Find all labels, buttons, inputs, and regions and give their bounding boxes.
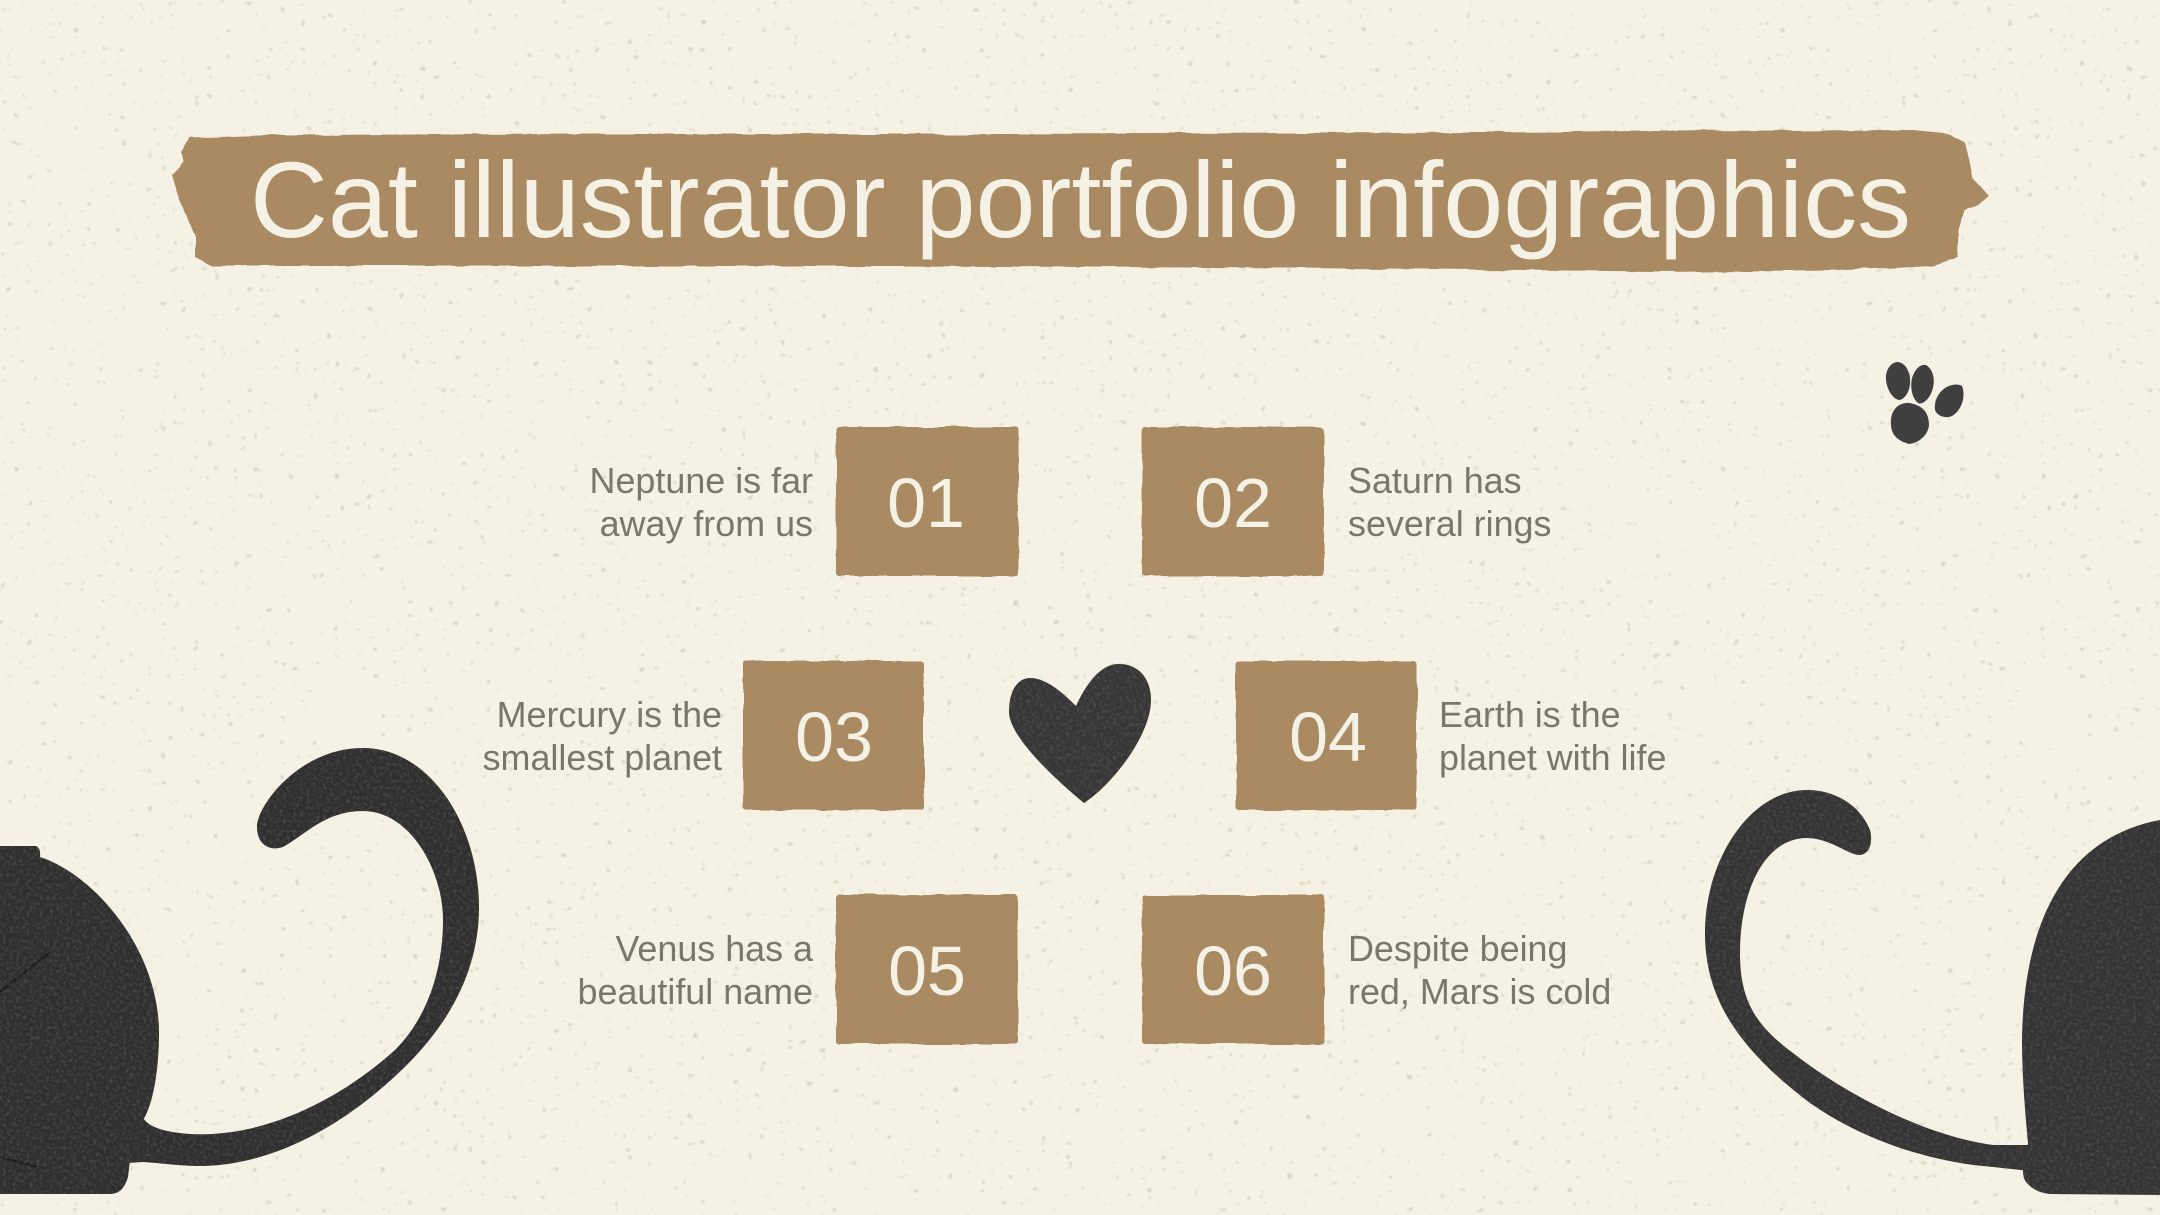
icon: paw print	[1886, 362, 1964, 444]
text 04: Earth is the	[1439, 695, 1621, 735]
text 01: Neptune is far	[590, 461, 813, 501]
text 05: beautiful name	[578, 972, 813, 1012]
number box 05	[836, 895, 1018, 1044]
number 06: 06	[1194, 932, 1272, 1010]
number 04: 04	[1289, 698, 1367, 776]
item 01	[590, 427, 1018, 576]
icon: heart	[1009, 664, 1151, 803]
right cat tail	[1705, 790, 2030, 1171]
right cat body	[2022, 820, 2160, 1195]
number 01: 01	[887, 464, 965, 542]
item 02	[1142, 427, 1551, 576]
left cat markings	[0, 953, 49, 992]
number 03: 03	[795, 698, 873, 776]
number box 06	[1142, 895, 1324, 1044]
number 02: 02	[1194, 464, 1272, 542]
item 06	[1142, 895, 1611, 1044]
left cat tail	[128, 748, 479, 1166]
text 03: smallest planet	[483, 738, 722, 778]
text 03: Mercury is the	[497, 695, 722, 735]
text 02: Saturn has	[1348, 461, 1522, 501]
text 02: several rings	[1348, 504, 1551, 544]
number box 01	[836, 427, 1018, 576]
left cat body	[0, 846, 159, 1194]
number 05: 05	[888, 932, 966, 1010]
title text: Cat illustrator portfolio infographics	[250, 139, 1911, 260]
number box 02	[1142, 427, 1324, 576]
item 03	[483, 661, 924, 810]
text 06: Despite being	[1348, 929, 1567, 969]
banner torn brush shape	[172, 130, 1989, 272]
cat right: body and tail	[1705, 790, 2160, 1195]
text 01: away from us	[600, 504, 813, 544]
text 04: planet with life	[1439, 738, 1666, 778]
text 06: red, Mars is cold	[1348, 972, 1611, 1012]
number box 03	[743, 661, 924, 810]
title banner	[172, 130, 1989, 272]
number box 04	[1236, 661, 1417, 810]
item 05	[578, 895, 1018, 1044]
item 04	[1236, 661, 1666, 810]
cat left: body and tail	[0, 748, 479, 1194]
text 05: Venus has a	[615, 929, 813, 969]
